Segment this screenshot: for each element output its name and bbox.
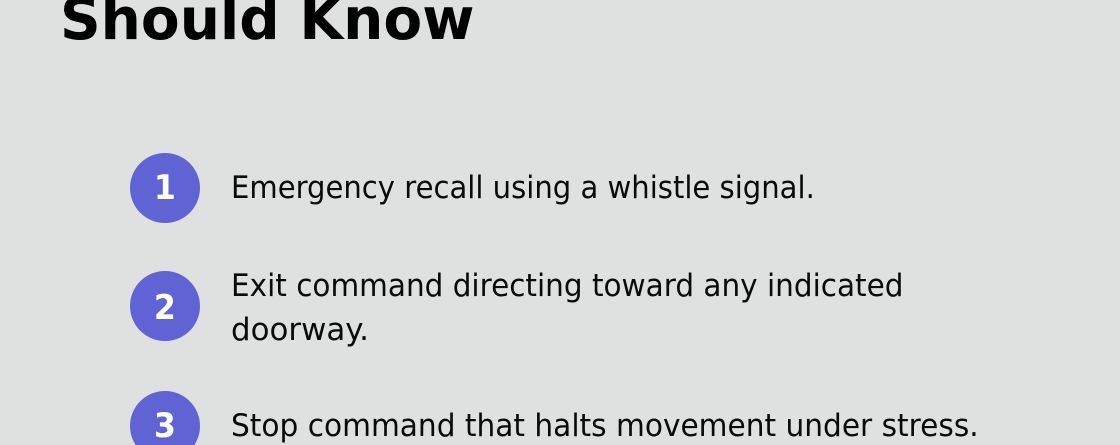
item 3 text: Stop command that halts movement under stress. (231, 408, 979, 444)
list item 1 (130, 153, 815, 223)
item 2 text: doorway. (231, 312, 369, 348)
item 2 text (231, 268, 903, 348)
number badge 2 (130, 271, 200, 341)
number badge 1: 1 (154, 168, 176, 208)
item 2 text: Exit command directing toward any indicated (231, 268, 903, 304)
list item 3 (130, 391, 979, 445)
number badge 2: 2 (154, 288, 176, 328)
number badge 3: 3 (154, 406, 176, 445)
number badge 3 (130, 391, 200, 445)
list item 2 (130, 268, 903, 348)
item 1 text: Emergency recall using a whistle signal. (231, 170, 815, 206)
number badge 1 (130, 153, 200, 223)
